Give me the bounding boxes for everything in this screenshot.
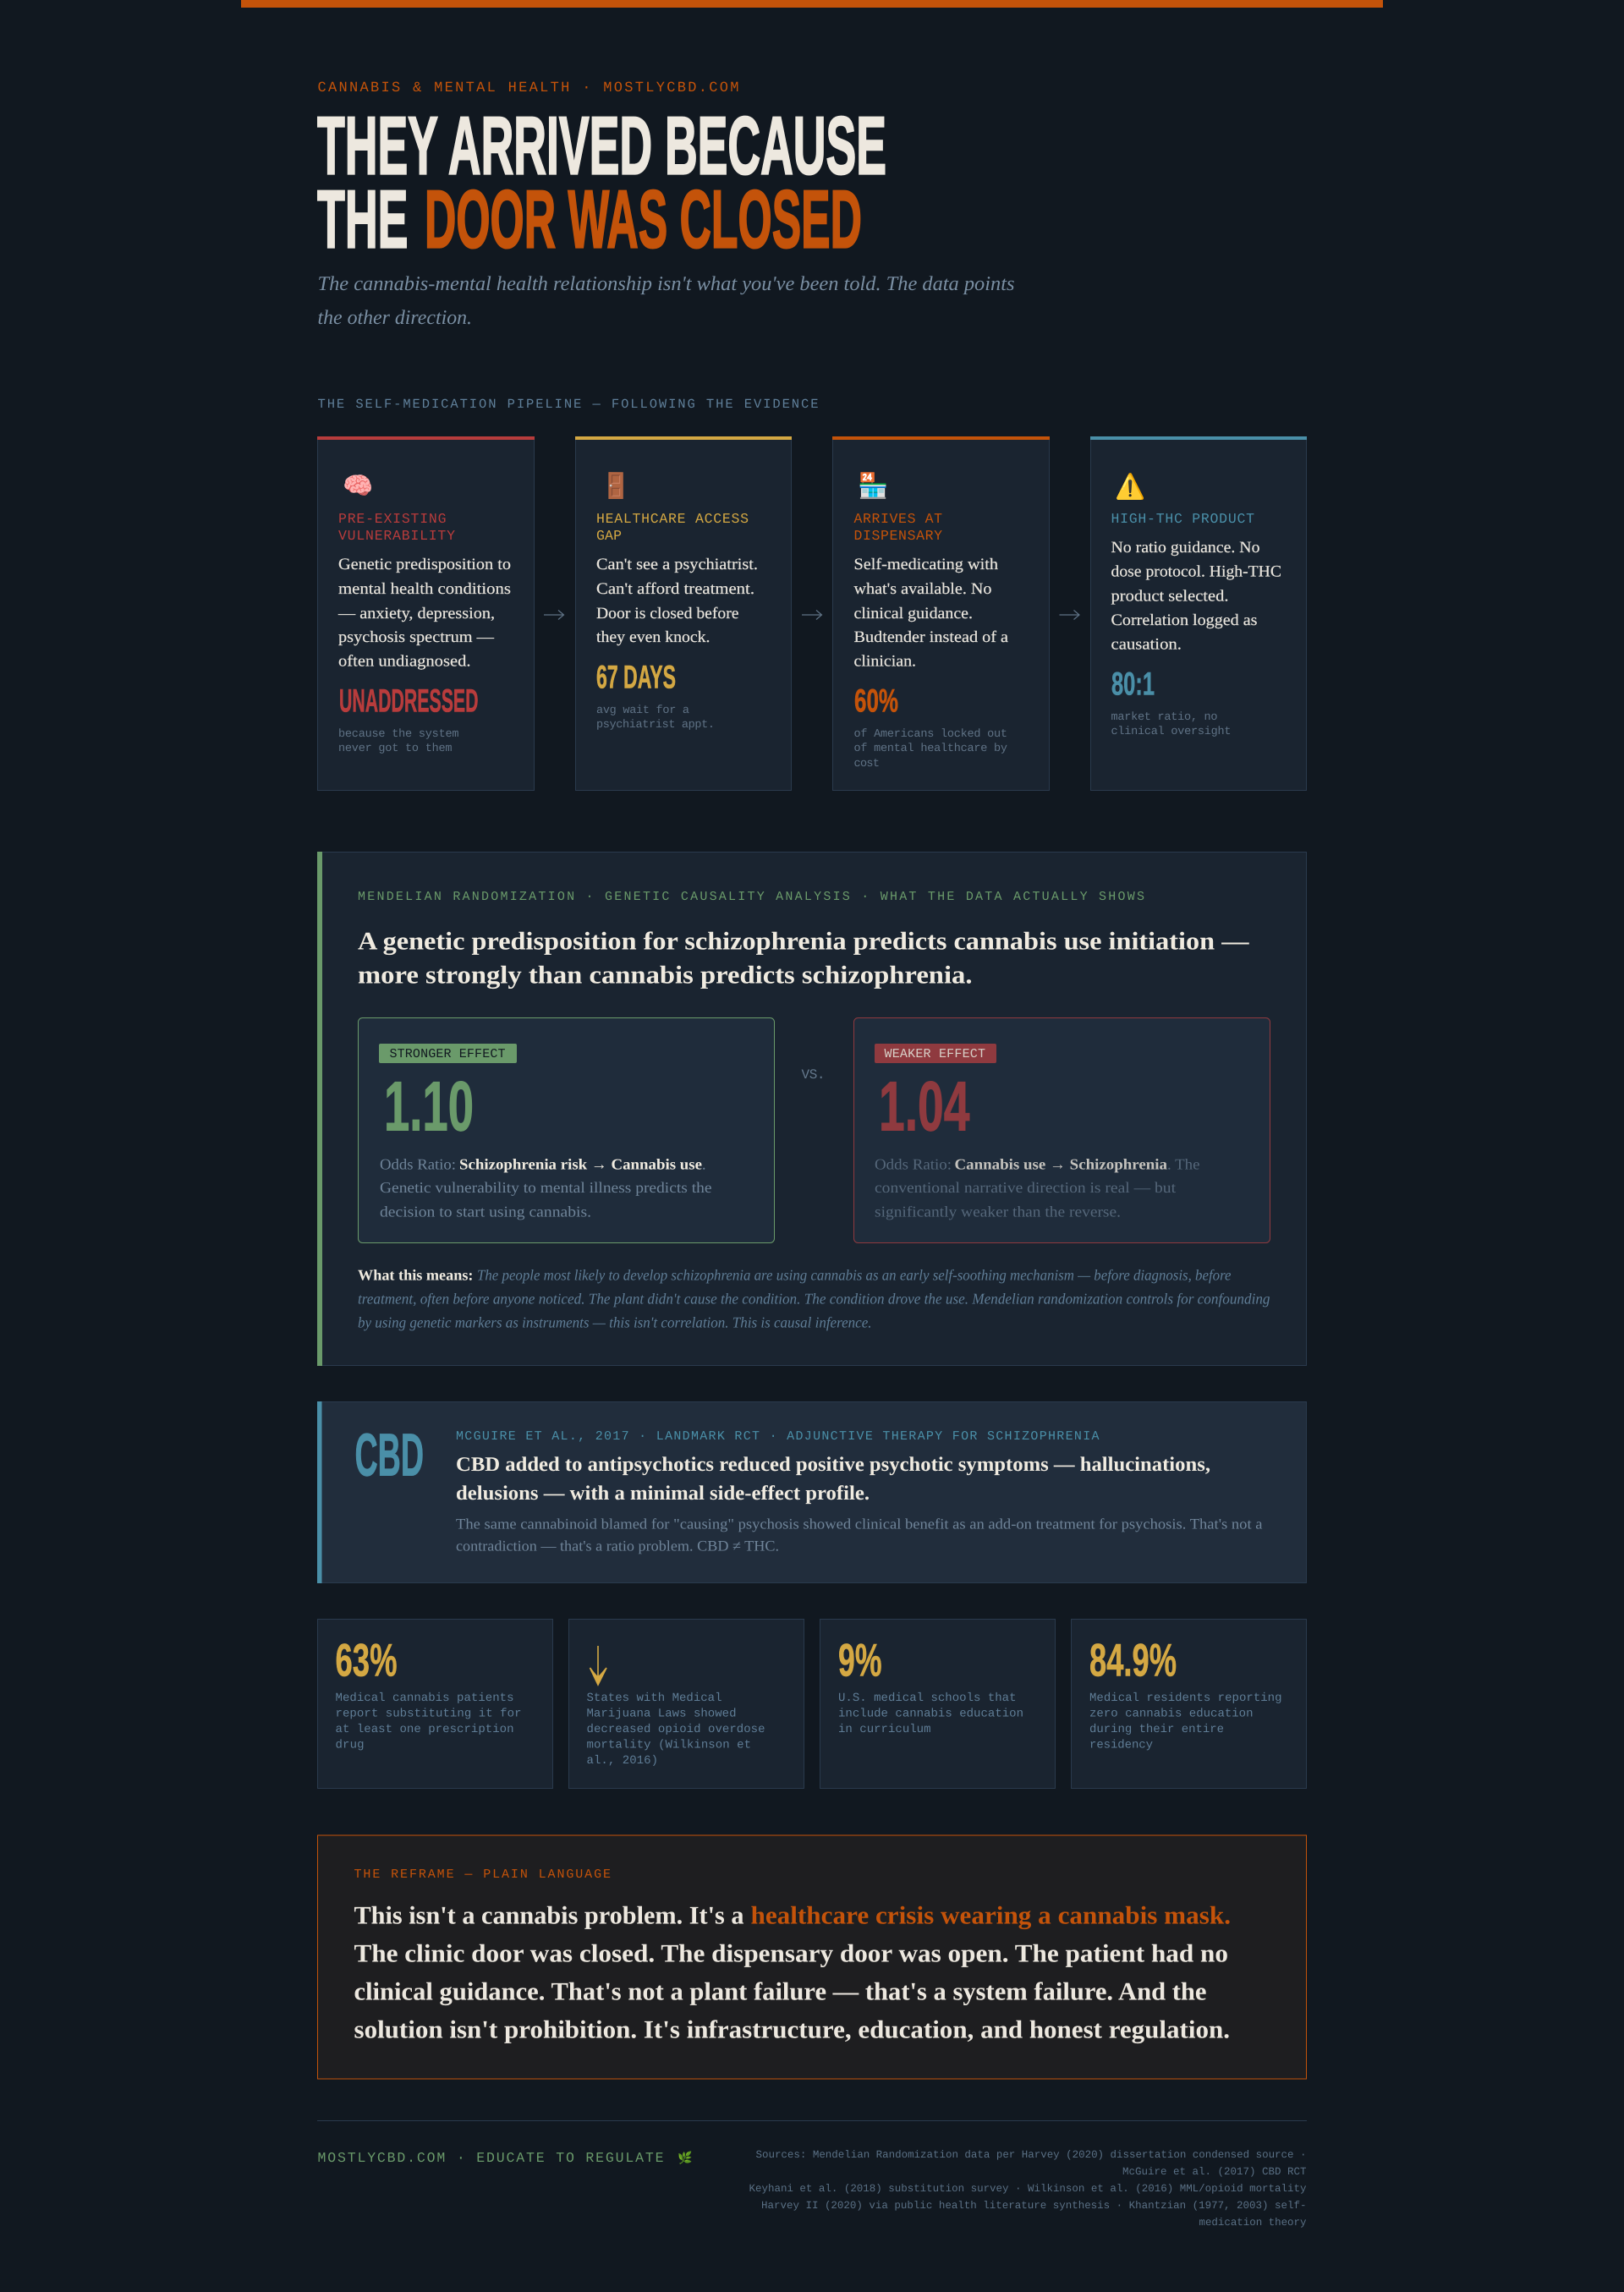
description: — anxiety, depression, [337,605,495,622]
stat note: of mental healthcare by [854,743,1007,755]
stat card: 63%: report substituting it for [335,1707,521,1720]
top accent bar [241,0,1383,8]
stat card: 9%: in curriculum [838,1723,930,1736]
heading [358,927,1250,990]
stat note [596,705,715,732]
label: VULNERABILITY [338,528,455,544]
finding: CBD added to antipsychotics reduced positive psychotic symptoms — hallucinations, [456,1454,1210,1476]
panel: pipeline step 1 [317,436,535,790]
stat note [854,728,1007,770]
heading: A genetic predisposition for schizophrenia predicts cannabis use initiation — [358,927,1250,956]
eyebrow: MENDELIAN RANDOMIZATION · GENETIC CAUSALITY ANALYSIS · WHAT THE DATA ACTUALLY SHOWS [358,890,1144,904]
description: No ratio guidance. No [1111,539,1260,557]
panel: pipeline step 3 [832,436,1050,790]
stat card: 63%: Medical cannabis patients [335,1692,514,1705]
sources: Keyhani et al. (2018) substitution survey · Wilkinson et al. (2016) MML/opioid mortality [749,2183,1307,2195]
subtitle: the other direction. [318,307,472,329]
description: Budtender instead of a [854,628,1009,646]
finding [456,1454,1210,1505]
sources [749,2149,1307,2229]
label: HEALTHCARE ACCESS [596,511,749,527]
statement [354,1901,1231,2043]
header [317,80,1015,329]
explanation [875,1155,1199,1220]
stat card: 84.9% [1071,1619,1306,1788]
icon: herb: 🌿 [678,2151,692,2165]
stat card: opioid arrow: States with Medical [587,1692,722,1705]
explanation: significantly weaker than the reverse. [875,1203,1121,1220]
label: GAP [596,528,622,544]
title: THE [317,173,408,266]
what this means: treatment, often before anyone noticed. The plant didn't cause the condition. The condition drove the use. Mendelian randomization controls for confounding [358,1291,1270,1308]
what this means: What this means: [358,1267,474,1284]
stat card: 9%: 9% [838,1634,881,1686]
title: DOOR WAS CLOSED [425,173,862,266]
label: PRE-EXISTING [338,511,447,527]
badge [379,1044,517,1063]
subtitle: The cannabis-mental health relationship isn't what you've been told. The data points [318,273,1015,295]
card: weaker effect [854,1018,1270,1243]
what this means: The people most likely to develop schizophrenia are using cannabis as an early self-soothing mechanism — before diagnosis, before [477,1267,1232,1284]
title [317,100,886,266]
description: they even knock. [596,628,710,646]
explanation: decision to start using cannabis. [380,1203,591,1220]
explanation: contradiction — that's a ratio problem. CBD ≠ THC. [456,1538,779,1555]
label: HIGH-THC PRODUCT [1111,511,1254,527]
stat: 60% [854,683,898,719]
description [596,556,758,646]
description: what's available. No [854,580,991,598]
arrow [544,611,563,619]
statement: healthcare crisis wearing a cannabis mask. [751,1901,1231,1930]
sources: Harvey II (2020) via public health literature synthesis · Khantzian (1977, 2003) self- [761,2200,1306,2212]
stat card: 63%: at least one prescription [335,1723,514,1736]
description: Correlation logged as [1111,611,1257,629]
stat card: 9% [820,1619,1056,1788]
badge [875,1044,996,1063]
sources: medication theory [1199,2217,1307,2229]
arrow [1059,611,1079,619]
stat card: 84.9%: zero cannabis education [1089,1707,1254,1720]
explanation: . The [1167,1155,1199,1172]
stat card: opioid arrow [568,1619,804,1788]
finding: delusions — with a minimal side-effect profile. [456,1483,870,1505]
label [854,511,942,544]
versus label: VS. [802,1067,826,1083]
stat note: avg wait for a [596,705,689,717]
explanation: Cannabis use → Schizophrenia [954,1155,1167,1172]
label [596,511,749,544]
label: ARRIVES AT [854,511,942,527]
stat note [1111,711,1232,738]
panel: mendelian randomization [317,852,1306,1366]
stat note: market ratio, no [1111,711,1218,724]
description: psychosis spectrum — [338,628,495,646]
explanation: Odds Ratio: [875,1155,952,1172]
sources: McGuire et al. (2017) CBD RCT [1122,2166,1307,2178]
footer brand: MOSTLYCBD.COM · EDUCATE TO REGULATE [318,2150,664,2166]
explanation: . [702,1155,705,1172]
explanation: Genetic vulnerability to mental illness predicts the [380,1179,712,1196]
stat card: 63%: 63% [335,1634,398,1686]
stat note: of Americans locked out [854,728,1007,741]
panel: pipeline step 4 [1090,436,1307,790]
heading: more strongly than cannabis predicts schizophrenia. [358,961,973,990]
stat card: 84.9%: during their entire [1089,1723,1224,1736]
stat note: clinical oversight [1111,726,1232,738]
stat note [338,728,458,755]
panel: the reframe [318,1835,1306,2079]
description: Genetic predisposition to [338,556,511,573]
stat card: 63% [318,1619,553,1788]
description: causation. [1111,636,1182,653]
explanation [456,1516,1263,1555]
description: Door is closed before [596,605,739,622]
icon: convenience store: 🏪 [858,471,888,501]
CBD tag: CBD [355,1423,424,1489]
subtitle [318,273,1015,329]
description: mental health conditions [338,580,511,598]
description [1111,539,1281,653]
stat card: opioid arrow: al., 2016) [587,1754,658,1768]
eyebrow: CANNABIS & MENTAL HEALTH · MOSTLYCBD.COM [318,80,739,96]
description: Can't afford treatment. [596,580,754,598]
description: clinical guidance. [854,605,973,622]
stat card: 84.9%: Medical residents reporting [1089,1692,1282,1705]
icon: down arrow [590,1646,606,1685]
statement: solution isn't prohibition. It's infrastructure, education, and honest regulation. [354,2016,1230,2043]
stat note: psychiatrist appt. [596,719,715,732]
explanation: The same cannabinoid blamed for "causing" psychosis showed clinical benefit as an add-on treatment for psychosis. That's not a [456,1516,1263,1533]
description: dose protocol. High-THC [1111,563,1281,580]
statement: clinical guidance. That's not a plant failure — that's a system failure. And the [354,1977,1206,2006]
icon: warning: ⚠️ [1115,472,1145,502]
stat card: 84.9%: 84.9% [1089,1634,1177,1686]
stat note: never got to them [338,743,452,755]
description: Self-medicating with [854,556,999,573]
stat: 67 DAYS [596,660,676,695]
section heading: pipeline: THE SELF-MEDICATION PIPELINE — FOLLOWING THE EVIDENCE [318,397,819,412]
description: often undiagnosed. [338,653,470,670]
panel: pipeline step 2 [575,436,792,790]
icon: brain: 🧠 [343,472,373,501]
description [337,556,511,670]
label: DISPENSARY [854,528,942,544]
label [338,511,455,544]
stat note: because the system [338,728,458,741]
odds ratio value: 1.10 [384,1067,474,1145]
explanation: conventional narrative direction is real — but [875,1179,1176,1196]
eyebrow: THE REFRAME — PLAIN LANGUAGE [354,1867,611,1882]
stat card: opioid arrow: Marijuana Laws showed [587,1707,736,1720]
stat card: opioid arrow: decreased opioid overdose [587,1723,765,1736]
explanation: Schizophrenia risk → Cannabis use [459,1155,702,1172]
explanation: Odds Ratio: [380,1155,456,1172]
what this means: by using genetic markers as instruments — this isn't correlation. This is causal inference. [358,1314,871,1331]
description [854,556,1009,670]
description: clinician. [854,653,916,670]
stat card: 84.9%: residency [1089,1739,1153,1752]
description: Can't see a psychiatrist. [596,556,758,573]
what this means [358,1267,1270,1331]
footer [317,2121,1307,2229]
stat card: 63%: drug [335,1739,364,1752]
description: product selected. [1111,587,1228,606]
citation: MCGUIRE ET AL., 2017 · LANDMARK RCT · ADJUNCTIVE THERAPY FOR SCHIZOPHRENIA [456,1429,1100,1444]
card: stronger effect [359,1018,775,1243]
odds ratio value: 1.04 [879,1067,969,1145]
stat note: cost [854,758,880,770]
badge: STRONGER EFFECT [389,1047,506,1061]
statement: The clinic door was closed. The dispensary door was open. The patient had no [354,1940,1228,1967]
title: THEY ARRIVED BECAUSE [317,100,886,191]
badge: WEAKER EFFECT [885,1047,985,1061]
explanation [380,1155,712,1220]
panel: CBD trial [317,1401,1306,1583]
stat card: opioid arrow: mortality (Wilkinson et [587,1739,751,1752]
stat card: 9%: U.S. medical schools that [838,1692,1017,1705]
statement: This isn't a cannabis problem. It's a [354,1901,744,1930]
arrow [802,611,822,619]
stat card: 9%: include cannabis education [838,1707,1023,1720]
stat: UNADDRESSED [339,683,479,719]
sources: Sources: Mendelian Randomization data per Harvey (2020) dissertation condensed source · [756,2149,1306,2161]
stat: 80:1 [1111,666,1155,702]
icon: door: 🚪 [601,471,631,501]
